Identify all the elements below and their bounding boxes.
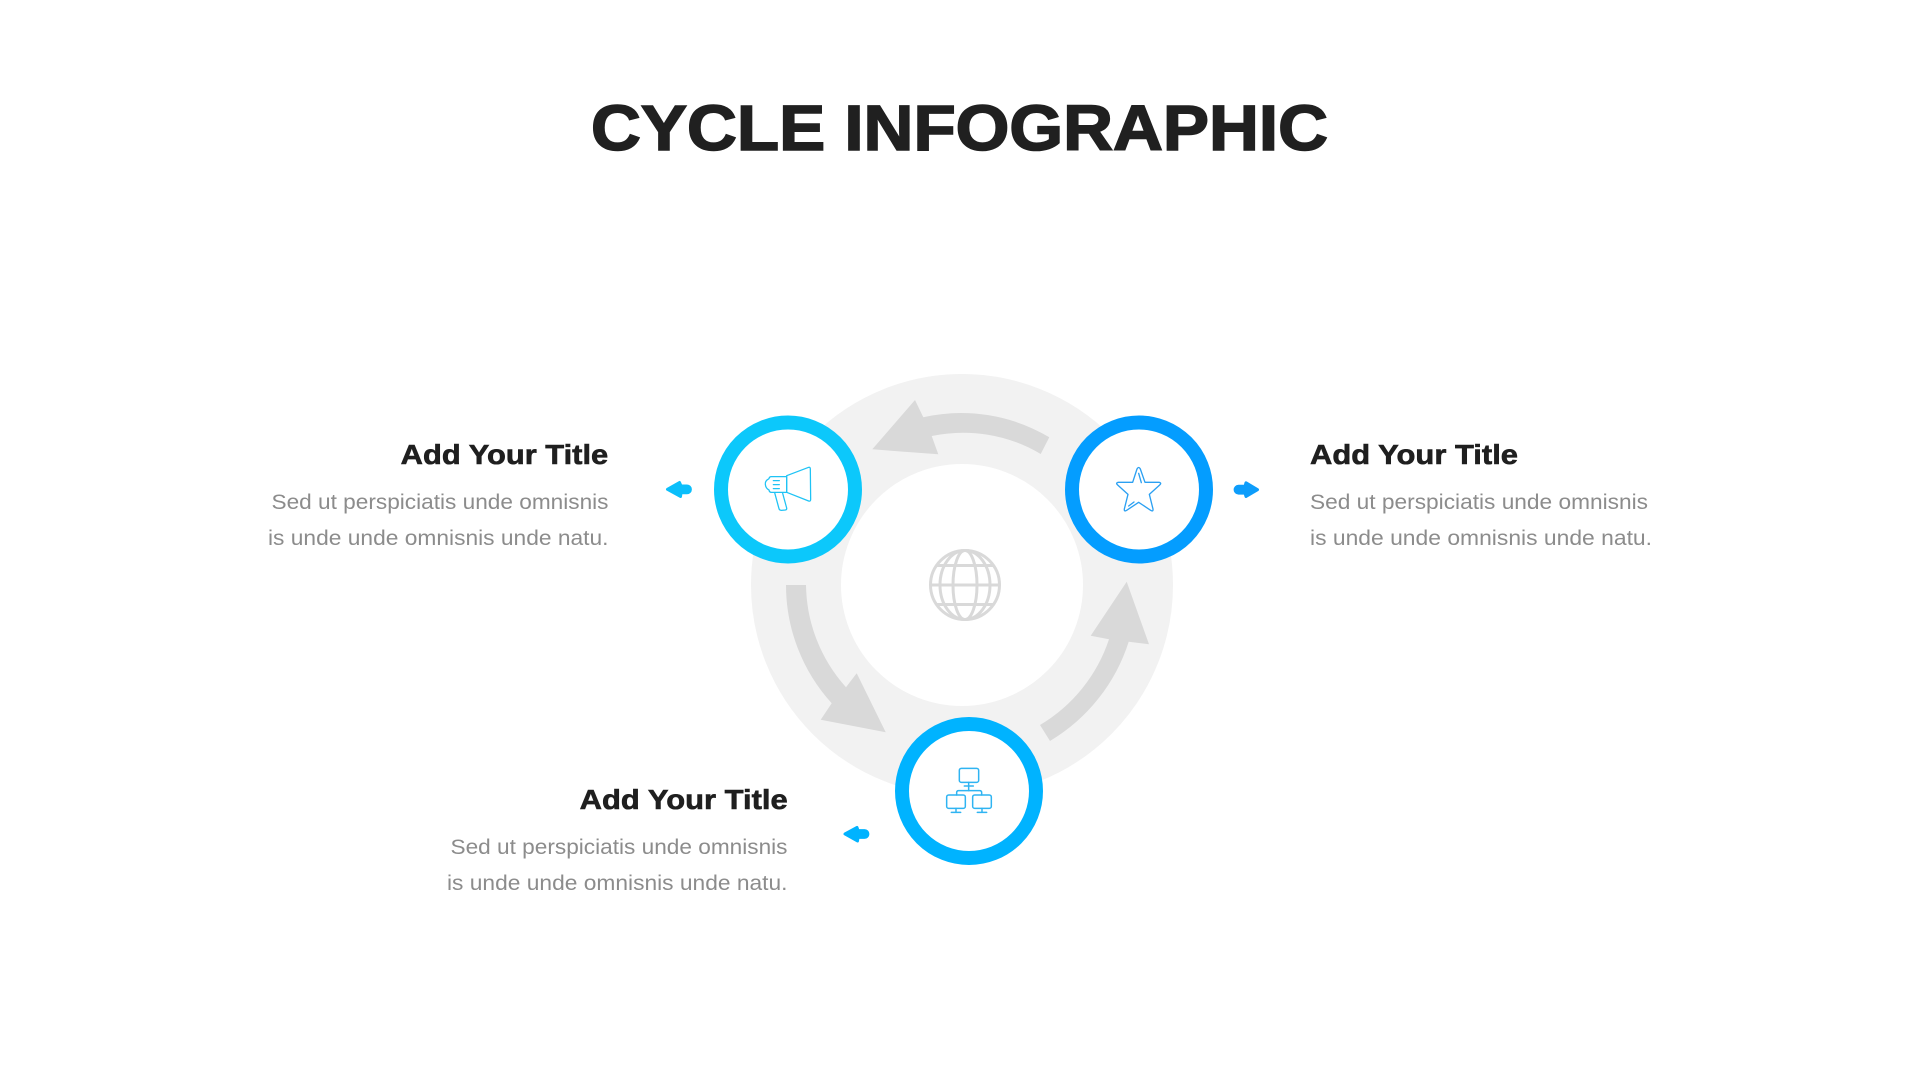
body text: Sed ut perspiciatis unde omnisnis <box>1310 491 1648 514</box>
text block: left <box>268 439 608 550</box>
body text <box>447 836 788 895</box>
arrow: bottom label pointer <box>845 828 868 841</box>
arrow: top, toward left <box>872 400 1049 454</box>
icon: network computers <box>947 768 991 812</box>
node ring <box>902 724 1036 858</box>
node: star <box>1072 422 1206 556</box>
title: CYCLE INFOGRAPHIC <box>591 92 1328 164</box>
body text: is unde unde omnisnis unde natu. <box>268 527 608 550</box>
heading: Add Your Title <box>1310 439 1518 470</box>
body text <box>1310 491 1652 550</box>
heading: Add Your Title <box>580 784 788 815</box>
text block: right <box>1310 439 1652 550</box>
body text: Sed ut perspiciatis unde omnisnis <box>450 836 788 859</box>
node ring <box>1072 422 1206 556</box>
arrow: left label pointer <box>668 482 690 496</box>
body text: is unde unde omnisnis unde natu. <box>1310 527 1652 550</box>
arrow: right, toward top <box>1040 582 1149 741</box>
arrow: left, toward bottom <box>786 585 886 732</box>
icon: star <box>1117 467 1161 511</box>
cycle ring <box>796 419 1128 751</box>
node: megaphone <box>721 422 855 556</box>
body text: is unde unde omnisnis unde natu. <box>447 872 788 895</box>
body text <box>268 491 608 550</box>
text block: bottom <box>447 784 788 895</box>
node ring <box>721 422 855 556</box>
icon: megaphone <box>765 467 811 510</box>
arrow: right label pointer <box>1235 483 1258 496</box>
body text: Sed ut perspiciatis unde omnisnis <box>272 491 608 514</box>
icon: globe <box>930 550 1000 620</box>
heading: Add Your Title <box>401 439 608 470</box>
node: network <box>902 724 1036 858</box>
